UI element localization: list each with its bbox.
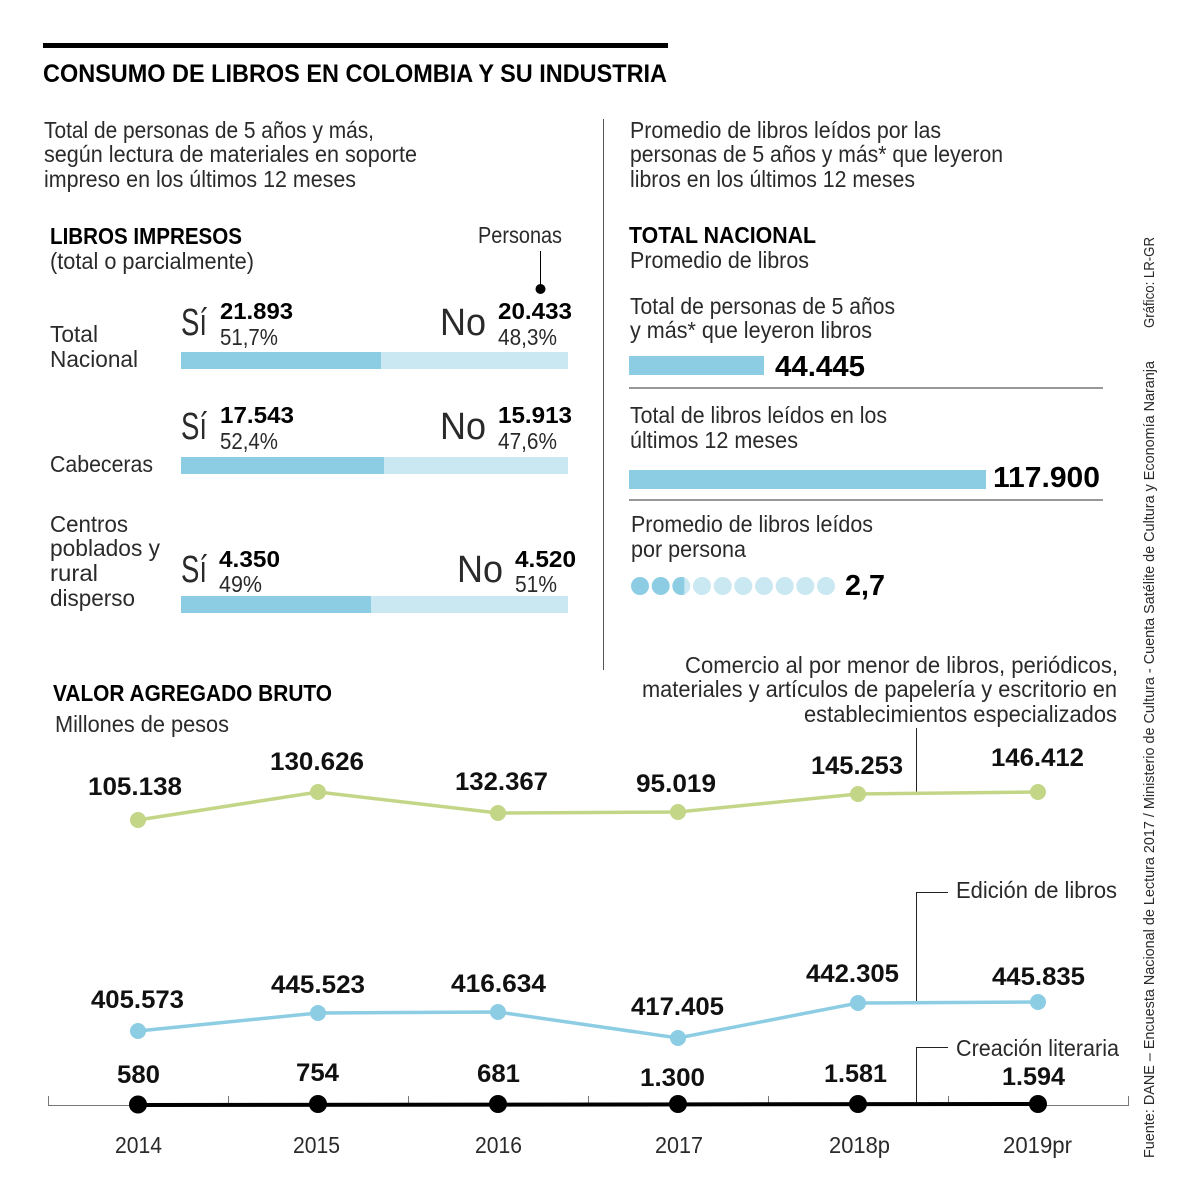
metric: promedio por persona: 2,7 [845, 570, 885, 602]
label: comercio al por menor [642, 652, 1118, 793]
heading: total nacional: TOTAL NACIONAL [629, 222, 816, 248]
row: centros poblados y rural disperso: rural [50, 560, 98, 586]
row: total nacional: Total [50, 321, 98, 347]
heading: total nacional: Promedio de libros [630, 247, 809, 273]
heading: libros impresos [50, 223, 254, 274]
row: cabeceras: 47,6% [498, 428, 557, 454]
label: creación literaria: Creación literaria [956, 1035, 1119, 1061]
axis: 2014 [115, 1132, 162, 1158]
left intro text: Total de personas de 5 años y más, [44, 117, 374, 143]
line series: comercio: 132.367 [455, 768, 548, 796]
metric: promedio por persona: Promedio de libros leídos [631, 511, 873, 537]
label: edición de libros: Edición de libros [956, 877, 1117, 903]
row: total nacional: Sí [181, 302, 207, 344]
axis: 2016 [475, 1132, 522, 1158]
heading: total nacional [629, 222, 816, 273]
right intro text [630, 117, 1003, 192]
line series: comercio: 130.626 [270, 748, 364, 776]
axis [48, 1096, 1128, 1158]
metric: personas que leyeron [629, 293, 895, 383]
left intro text: impreso en los últimos 12 meses [44, 166, 356, 192]
line series: comercio [88, 744, 1084, 828]
metric: promedio por persona: por persona [631, 536, 746, 562]
left intro text [44, 117, 417, 192]
line series: comercio: 145.253 [811, 752, 903, 780]
line series: comercio: 146.412 [991, 744, 1084, 772]
row: centros poblados y rural disperso: poblados y [50, 535, 160, 561]
metric: libros leidos: Total de libros leídos en los [630, 402, 887, 428]
label: comercio al por menor: Comercio al por menor de libros, periódicos, [685, 652, 1118, 678]
axis: 2017 [655, 1132, 703, 1158]
line series: edición: 445.835 [992, 963, 1085, 991]
heading: libros impresos: (total o parcialmente) [50, 248, 254, 274]
row: centros poblados y rural disperso: No [457, 549, 503, 591]
legend: personas [478, 222, 562, 294]
line series: edición: 445.523 [271, 971, 365, 999]
metric: promedio por persona [631, 511, 885, 602]
row: total nacional: No [440, 302, 486, 344]
row: total nacional: 20.433 [498, 298, 572, 324]
line series: edición: 405.573 [91, 986, 184, 1014]
right intro text: libros en los últimos 12 meses [630, 166, 915, 192]
row: total nacional: Nacional [50, 346, 138, 372]
row: total nacional [50, 298, 572, 372]
row: centros poblados y rural disperso: 51% [515, 571, 557, 597]
line series: edición: 417.405 [631, 993, 724, 1021]
left intro text: según lectura de materiales en soporte [44, 141, 417, 167]
source credit: Fuente: DANE – Encuesta Nacional de Lectura 2017 / Ministerio de Cultura - Cuenta Satélite de Cultura y Economía Naranja [1141, 360, 1158, 1158]
legend: personas: Personas [478, 222, 562, 248]
line series: edición: 416.634 [451, 970, 546, 998]
row: total nacional: 21.893 [220, 298, 293, 324]
row: centros poblados y rural disperso: disperso [50, 585, 135, 611]
panel: total nacional [629, 222, 1103, 602]
row: total nacional: 48,3% [498, 324, 557, 350]
metric: libros leidos: 117.900 [993, 462, 1100, 494]
title bar [43, 43, 668, 48]
axis: 2019pr [1003, 1132, 1072, 1158]
row: centros poblados y rural disperso: 4.350 [219, 546, 280, 572]
row: centros poblados y rural disperso: 4.520 [515, 546, 576, 572]
line series: creación literaria: 580 [117, 1061, 160, 1089]
metric: personas que leyeron: 44.445 [775, 351, 865, 383]
row: cabeceras: 15.913 [498, 402, 572, 428]
axis: 2015 [293, 1132, 340, 1158]
line series: comercio: 95.019 [636, 770, 716, 798]
heading: valor agregado bruto: Millones de pesos [55, 711, 229, 737]
row: cabeceras: 52,4% [220, 428, 278, 454]
metric: personas que leyeron: y más* que leyeron libros [630, 317, 872, 343]
row: centros poblados y rural disperso: Centros [50, 511, 128, 537]
label: comercio al por menor: materiales y artículos de papelería y escritorio en [642, 676, 1117, 702]
heading: valor agregado bruto [53, 680, 332, 737]
line series: edición [91, 960, 1085, 1046]
line series: comercio: 105.138 [88, 773, 182, 801]
line series: creación literaria: 754 [296, 1059, 339, 1087]
label: comercio al por menor: establecimientos especializados [804, 701, 1117, 727]
line series: creación literaria [117, 1059, 1065, 1114]
line series: creación literaria: 1.581 [824, 1060, 887, 1088]
metric: libros leidos [629, 402, 1100, 494]
row: cabeceras: 17.543 [220, 402, 294, 428]
right intro text: Promedio de libros leídos por las [630, 117, 941, 143]
line series: creación literaria: 681 [477, 1060, 520, 1088]
heading: libros impresos: LIBROS IMPRESOS [50, 223, 242, 249]
row: cabeceras [50, 402, 572, 477]
row: cabeceras: No [440, 406, 486, 448]
metric: libros leidos: últimos 12 meses [630, 427, 798, 453]
row: centros poblados y rural disperso: 49% [219, 571, 262, 597]
label: creación literaria [916, 1035, 1119, 1102]
row: centros poblados y rural disperso [50, 511, 576, 613]
heading: valor agregado bruto: VALOR AGREGADO BRUTO [53, 680, 332, 706]
label: edición de libros [916, 877, 1117, 1002]
right intro text: personas de 5 años y más* que leyeron [630, 141, 1003, 167]
panel: valor agregado bruto [48, 652, 1128, 1158]
line series: creación literaria: 1.594 [1002, 1063, 1065, 1091]
title: CONSUMO DE LIBROS EN COLOMBIA Y SU INDUSTRIA [43, 60, 667, 88]
axis: 2018p [829, 1132, 890, 1158]
metric: personas que leyeron: Total de personas de 5 años [630, 293, 895, 319]
graphic credit: Gráfico: LR-GR [1141, 237, 1158, 328]
line series: edición: 442.305 [806, 960, 899, 988]
panel: libros impresos [50, 222, 576, 613]
row: centros poblados y rural disperso: Sí [181, 549, 207, 591]
line series: creación literaria: 1.300 [640, 1064, 705, 1092]
row: cabeceras: Cabeceras [50, 451, 153, 477]
row: total nacional: 51,7% [220, 324, 278, 350]
row: cabeceras: Sí [181, 406, 207, 448]
